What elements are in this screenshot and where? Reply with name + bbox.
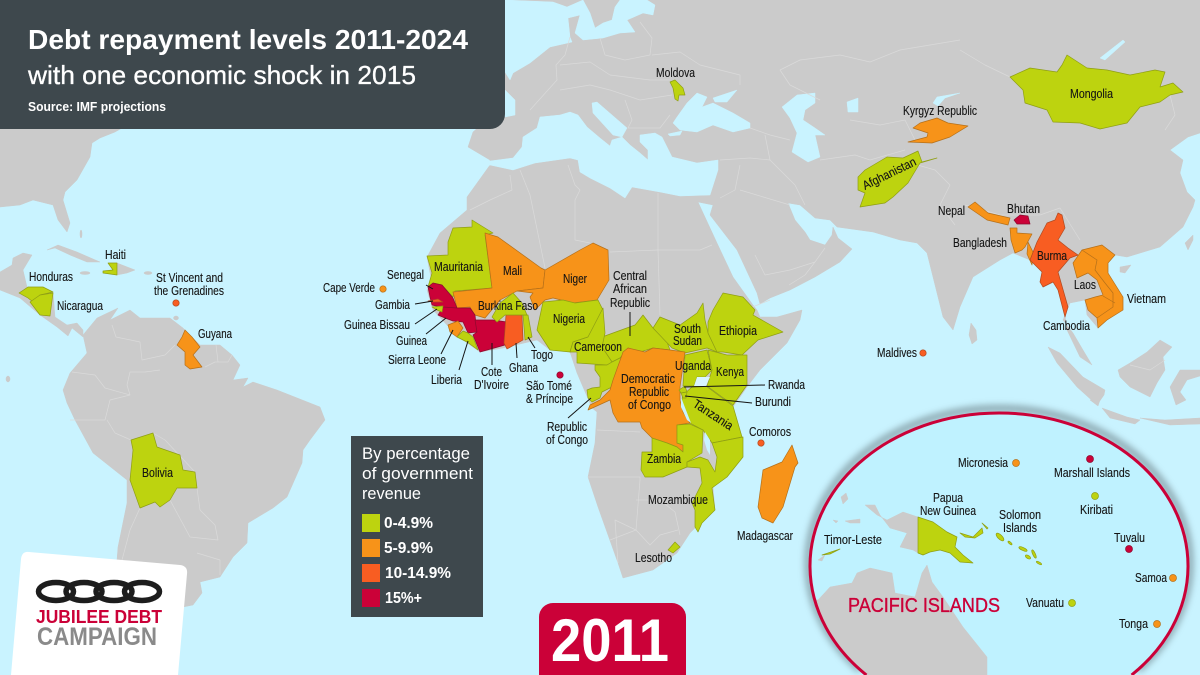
- country: Rwanda: Rwanda: [768, 378, 805, 392]
- country: Republic of Congo: of Congo: [546, 433, 588, 447]
- country: Senegal: [387, 268, 457, 308]
- country: Democratic Republic of Congo: Democratic: [621, 372, 675, 386]
- country: Haiti: [103, 248, 126, 275]
- country: Haiti: Haiti: [105, 248, 126, 262]
- country: Liberia: Liberia: [431, 373, 462, 387]
- title panel: [0, 0, 505, 129]
- country: Zambia: [641, 424, 703, 477]
- country: Central African Republic: [602, 269, 670, 362]
- country: Bolivia: Bolivia: [142, 466, 173, 480]
- island: Cape Verde: Cape Verde: [323, 281, 375, 295]
- countries: Laos, Vietnam, Cambodia: Cambodia: [1043, 319, 1090, 333]
- countries: Honduras and Nicaragua: [19, 270, 103, 316]
- country: Bangladesh: [953, 228, 1033, 265]
- island: Tuvalu: [1114, 531, 1145, 552]
- logo wordmark: CAMPAIGN: [37, 623, 157, 651]
- country: Kenya: [707, 350, 747, 405]
- country: Sierra Leone: [388, 321, 463, 367]
- country: Burkina Faso: [478, 293, 538, 322]
- island: Tonga: [1119, 619, 1161, 630]
- country: Guinea: Guinea: [396, 334, 427, 348]
- inset map: [805, 456, 1176, 675]
- country: Sierra Leone: Sierra Leone: [388, 353, 446, 367]
- country: Kenya: Kenya: [716, 365, 744, 379]
- country: Togo: [523, 315, 553, 362]
- legend item: 15%+: [362, 589, 422, 607]
- country: Mozambique: Mozambique: [648, 493, 708, 507]
- land: Australia: [805, 565, 987, 675]
- country: Solomon Islands: Islands: [1003, 521, 1037, 535]
- island: Sao Tome and Principe: & Príncipe: [526, 392, 573, 406]
- country: Mali: Mali: [503, 264, 522, 278]
- country: Papua New Guinea: New Guinea: [920, 504, 976, 518]
- country: Central African Republic: Central: [613, 269, 647, 283]
- country: Mali: [453, 233, 545, 318]
- legend item: 0-4.9%: 0-4.9%: [384, 515, 433, 532]
- country: Togo: Togo: [531, 348, 553, 362]
- country: Solomon Islands: [995, 508, 1042, 565]
- island: Sao Tome and Principe: [526, 372, 573, 406]
- country: Lesotho: [635, 542, 680, 565]
- land: Afro-Eurasia: [427, 0, 1200, 578]
- country: South Sudan: Sudan: [673, 334, 702, 348]
- country: Madagascar: Madagascar: [737, 529, 793, 543]
- country: Mauritania: [427, 220, 493, 297]
- country: Papua New Guinea: [918, 491, 988, 563]
- country: Burundi: Burundi: [755, 395, 791, 409]
- seas: north sea, baltic, mediterranean and inland waters: [480, 0, 1125, 198]
- country: Democratic Republic of Congo: Republic: [629, 385, 669, 399]
- subheading: with one economic shock in 2015: [27, 60, 416, 90]
- country: Kyrgyz Republic: [903, 104, 977, 143]
- island: Vanuatu: Vanuatu: [1026, 596, 1064, 610]
- country: Cote d'Ivoire: [473, 320, 509, 392]
- island: St Vincent and the Grenadines: the Grenadines: [154, 284, 224, 298]
- legend title: of government: [362, 465, 473, 483]
- country: Uganda: Uganda: [675, 359, 711, 373]
- logo wordmark: [36, 606, 163, 651]
- country: Nepal: Nepal: [938, 204, 965, 218]
- island: Comoros: Comoros: [749, 425, 791, 439]
- lake: Tanganyika: [681, 397, 691, 423]
- island: Marshall Islands: [1054, 455, 1130, 477]
- land: North America: [0, 0, 330, 232]
- country: Papua New Guinea: Papua: [933, 491, 963, 505]
- legend item: 10-14.9%: 10-14.9%: [385, 565, 451, 582]
- country: Gambia: Gambia: [375, 298, 410, 312]
- legend item: 10-14.9%: [362, 564, 451, 582]
- island: Vanuatu: [1026, 598, 1076, 607]
- inset heading: PACIFIC ISLANDS: [848, 595, 1000, 617]
- countries: Laos, Vietnam, Cambodia: Laos: [1074, 278, 1096, 292]
- country: Nigeria: [537, 300, 603, 352]
- country: Guyana: [177, 327, 232, 369]
- country: South Sudan: [653, 303, 717, 353]
- source note: Source: IMF projections: [28, 100, 166, 114]
- island: Comoros: [749, 425, 791, 446]
- lake: Malawi: [704, 432, 710, 455]
- country: Timor-Leste: Timor-Leste: [824, 533, 882, 547]
- country borders: [70, 22, 1175, 575]
- legend item: 15%+: 15%+: [385, 590, 422, 607]
- island: Maldives: Maldives: [877, 346, 917, 360]
- country: Ethiopia: [708, 293, 783, 355]
- country: Cameroon: [570, 308, 622, 365]
- heading: Debt repayment levels 2011-2024: [28, 24, 468, 55]
- country: Gambia: [375, 298, 443, 312]
- country: Mauritania: Mauritania: [434, 260, 483, 274]
- logo: Jubilee Debt Campaign: [11, 552, 187, 675]
- country: Bhutan: [1007, 202, 1040, 224]
- country: Guinea Bissau: Guinea Bissau: [344, 318, 410, 332]
- country: Burma: Burma: [1037, 249, 1067, 263]
- land: South America: [63, 308, 325, 620]
- country: Afghanistan: Afghanistan: [860, 155, 918, 193]
- country: Ethiopia: Ethiopia: [719, 324, 757, 338]
- island: Micronesia: [958, 458, 1020, 467]
- countries: Honduras and Nicaragua: Nicaragua: [57, 299, 103, 313]
- country: Bangladesh: Bangladesh: [953, 236, 1007, 250]
- countries: Laos, Vietnam, Cambodia: Vietnam: [1127, 292, 1166, 306]
- country: Central African Republic: Republic: [610, 296, 650, 310]
- country: Guyana: Guyana: [198, 327, 232, 341]
- country: Nepal: [938, 202, 1010, 225]
- island: Marshall Islands: Marshall Islands: [1054, 466, 1130, 480]
- island: St Vincent and the Grenadines: St Vincent and: [156, 271, 223, 285]
- country: Madagascar: [737, 445, 798, 543]
- country: Zambia: Zambia: [647, 452, 681, 466]
- island: Kiribati: Kiribati: [1080, 503, 1113, 517]
- country: Solomon Islands: Solomon: [999, 508, 1041, 522]
- country: Lesotho: Lesotho: [635, 551, 672, 565]
- land: islands: [6, 121, 1200, 425]
- country: Cote d'Ivoire: D'Ivoire: [474, 378, 509, 392]
- year badge: 2011: [551, 607, 669, 674]
- country: South Sudan: South: [674, 322, 701, 336]
- legend panel: [351, 436, 483, 617]
- country: Central African Republic: African: [613, 282, 647, 296]
- country: Mongolia: Mongolia: [1070, 87, 1113, 101]
- country: Cameroon: Cameroon: [574, 340, 622, 354]
- country: Burundi: [681, 392, 791, 409]
- land: Central America and Mexico: [0, 253, 83, 337]
- country: Mongolia: [1010, 55, 1183, 129]
- island: Tonga: Tonga: [1119, 617, 1148, 631]
- country: Rwanda: [679, 378, 805, 393]
- country: Burma: [1030, 213, 1078, 317]
- country: Tanzania: Tanzania: [690, 397, 736, 433]
- legend title: By percentage: [362, 445, 470, 463]
- land: western New Guinea and nearby islands: [818, 493, 918, 561]
- country: Cote d'Ivoire: Cote: [481, 365, 502, 379]
- country: Mozambique: [648, 437, 743, 532]
- legend item: 5-9.9%: [362, 539, 433, 557]
- country: Afghanistan: [858, 151, 937, 207]
- country: Liberia: [431, 331, 478, 387]
- legend title: revenue: [362, 485, 421, 503]
- country: Bhutan: Bhutan: [1007, 202, 1040, 216]
- country: Moldova: [656, 66, 695, 101]
- logo wordmark: JUBILEE DEBT: [36, 606, 163, 627]
- country: Guinea Bissau: [344, 306, 443, 332]
- country: Guinea: [396, 307, 477, 348]
- legend item: 5-9.9%: 5-9.9%: [384, 540, 433, 557]
- island: St Vincent and the Grenadines: [154, 271, 224, 306]
- country: Bolivia: [130, 433, 197, 508]
- island: Samoa: Samoa: [1135, 571, 1167, 585]
- legend item: 0-4.9%: [362, 514, 433, 532]
- country: Burkina Faso: Burkina Faso: [478, 299, 538, 313]
- island: Micronesia: Micronesia: [958, 456, 1008, 470]
- country: Republic of Congo: [546, 357, 622, 447]
- country: Moldova: Moldova: [656, 66, 695, 80]
- country: Timor-Leste: [822, 533, 882, 555]
- icon: chain links: [38, 582, 160, 600]
- island: Sao Tome and Principe: São Tomé: [526, 379, 572, 393]
- country: Republic of Congo: Republic: [547, 420, 587, 434]
- country: Kyrgyz Republic: Kyrgyz Republic: [903, 104, 977, 118]
- country: Niger: [517, 243, 609, 310]
- island: Kiribati: [1080, 492, 1112, 514]
- country: Ghana: [504, 315, 538, 375]
- country: Uganda: [675, 350, 712, 386]
- country: Tanzania: [680, 386, 742, 443]
- countries: Honduras and Nicaragua: Honduras: [29, 270, 73, 284]
- country: Niger: Niger: [563, 272, 587, 286]
- panel: Pacific Islands inset: [805, 408, 1190, 675]
- island: Tuvalu: Tuvalu: [1114, 531, 1145, 545]
- country: Democratic Republic of Congo: of Congo: [628, 398, 671, 412]
- country: Ghana: Ghana: [509, 361, 538, 375]
- country: Nigeria: Nigeria: [553, 312, 585, 326]
- island: Samoa: [1135, 573, 1177, 582]
- country: Senegal: Senegal: [387, 268, 424, 282]
- country: Democratic Republic of Congo: [588, 348, 690, 452]
- countries: Laos, Vietnam, Cambodia: [1043, 245, 1166, 333]
- legend title: [362, 445, 473, 503]
